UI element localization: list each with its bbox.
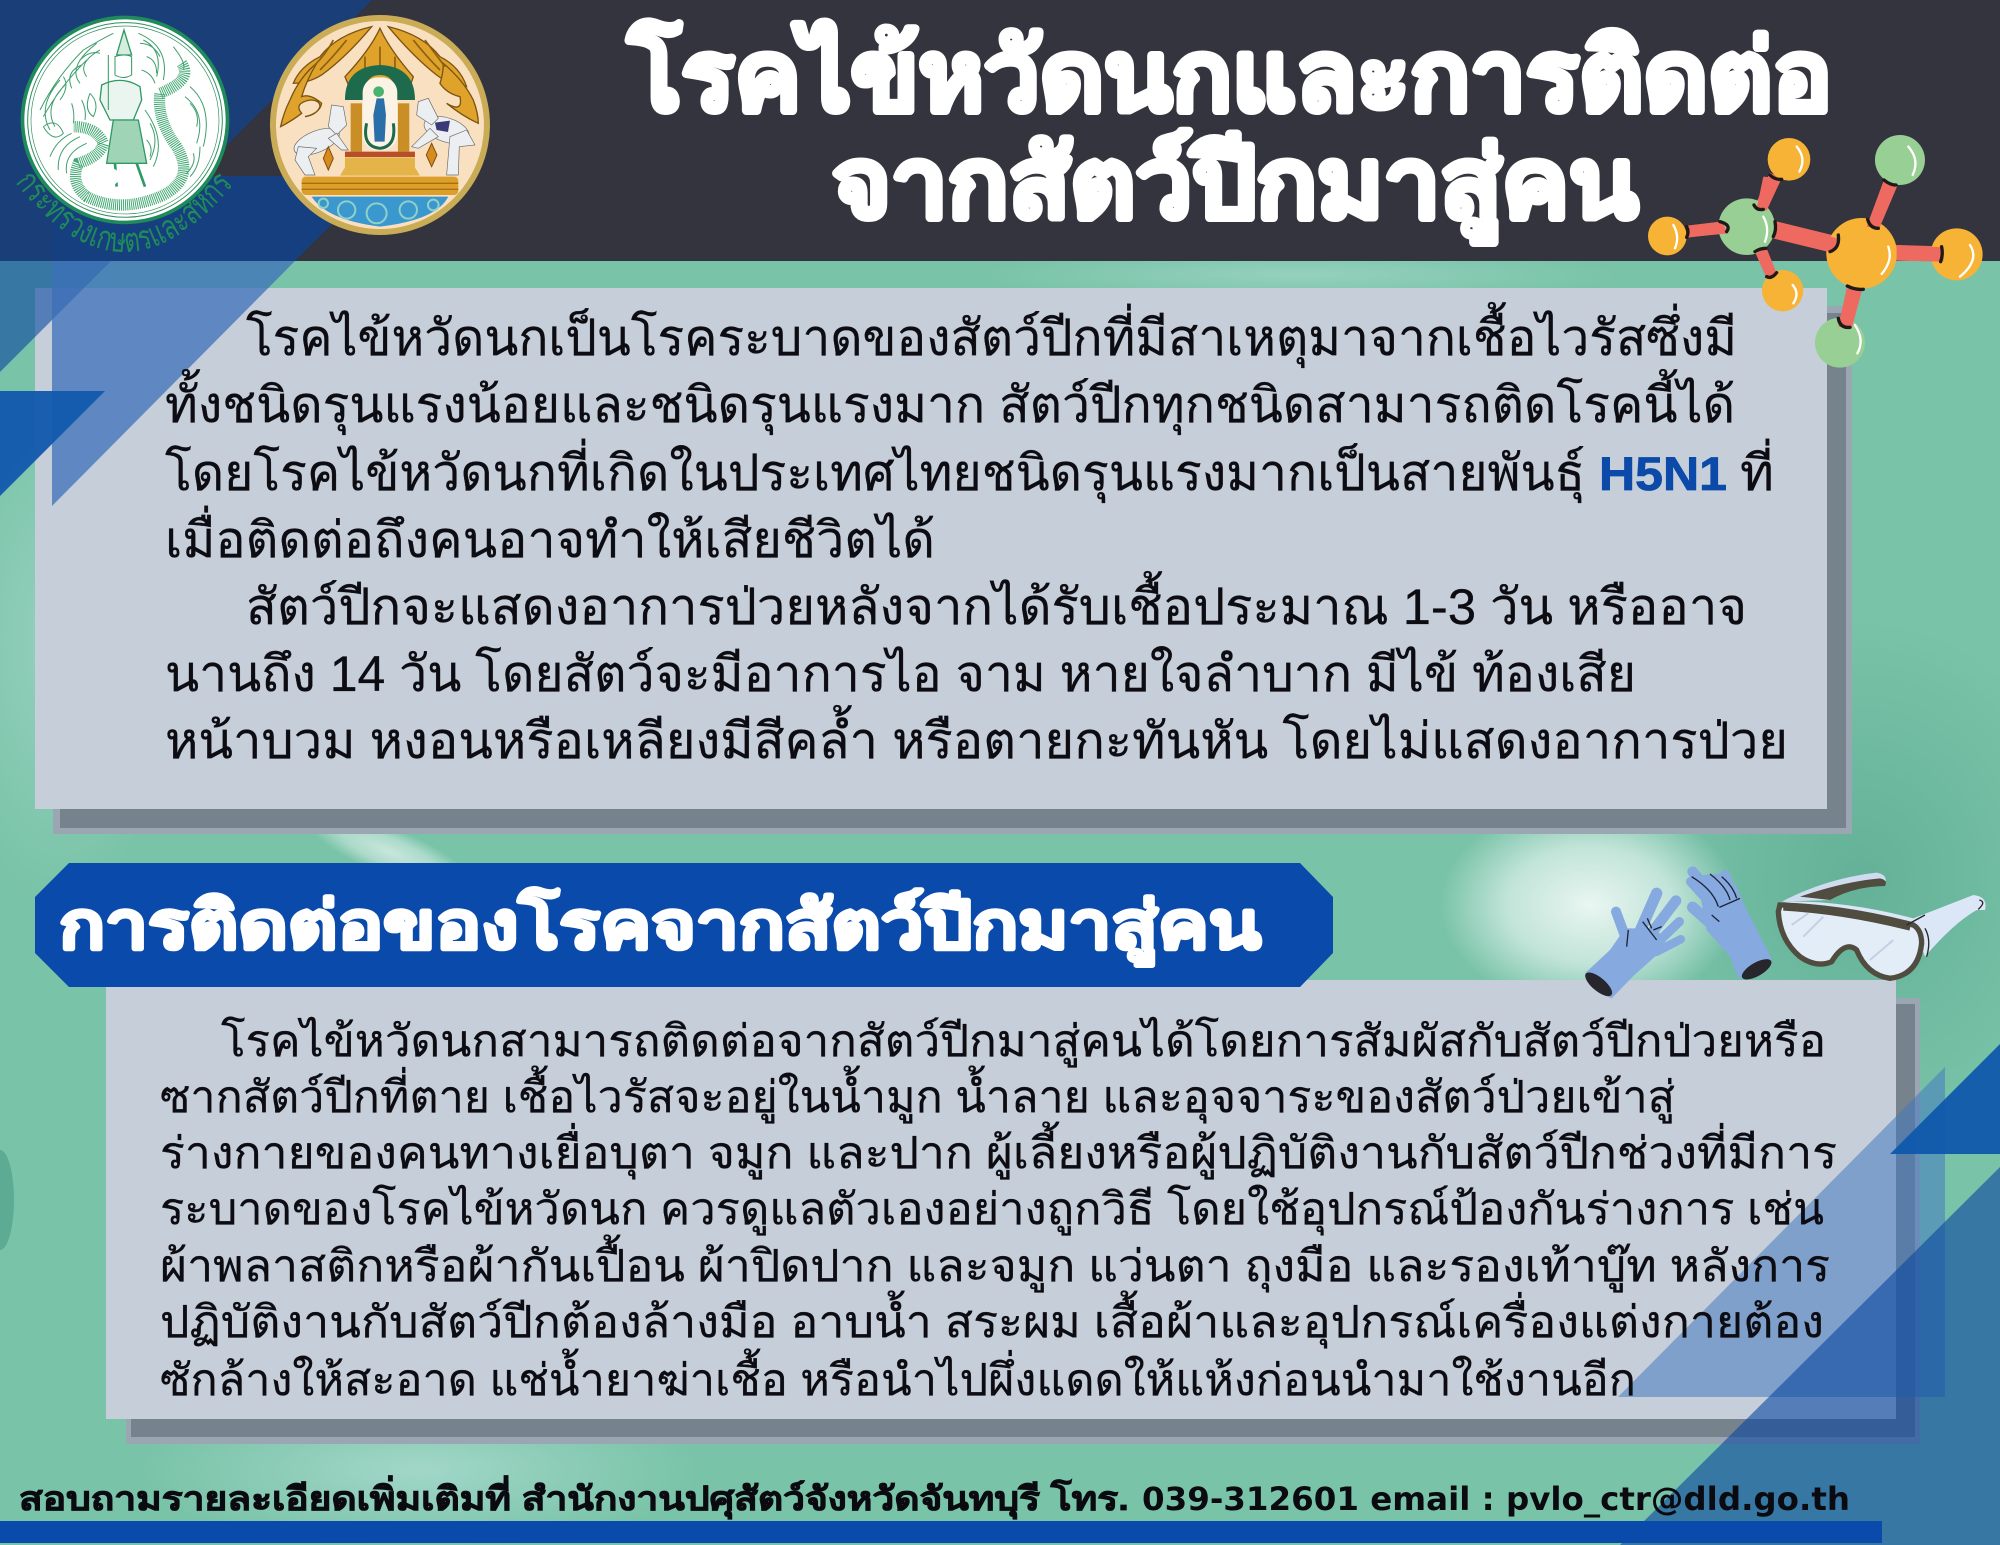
text block: transmission: โรคไข้หวัดนกสามารถติดต่อจากสัตว์ปีกมาสู่คนได้โดยการสัมผัสกับสัตว์ปีกป่วยหรือ bbox=[221, 1016, 1826, 1068]
icon: molecule bbox=[1648, 135, 1983, 368]
panel: transmission shadow bbox=[126, 998, 1920, 1444]
footer contact text: สอบถามรายละเอียดเพิ่มเติมที่ สำนักงานปศุสัตว์จังหวัดจันทบุรี โทร. bbox=[19, 1475, 1129, 1520]
text block: transmission: ปฏิบัติงานกับสัตว์ปีกต้องล้างมือ อาบน้ำ สระผม เสื้อผ้าและอุปกรณ์เครื่องแต่งกายต้อง bbox=[160, 1290, 1824, 1349]
footer contact text bbox=[19, 1475, 1850, 1520]
text block: disease description: โรคไข้หวัดนกเป็นโรคระบาดของสัตว์ปีกที่มีสาเหตุมาจากเชื้อไวรัสซึ่งมี bbox=[246, 302, 1737, 368]
text block: transmission bbox=[160, 1016, 1837, 1405]
text block: transmission: ร่างกายของคนทางเยื่อบุตา จมูก และปาก ผู้เลี้ยงหรือผู้ปฏิบัติงานกับสัตว์ปีกช่วงที่มีการ bbox=[160, 1121, 1837, 1180]
panel: disease description shadow bbox=[53, 306, 1852, 834]
text block: disease description: ทั้งชนิดรุนแรงน้อยและชนิดรุนแรงมาก สัตว์ปีกทุกชนิดสามารถติดโรคนี้ได้ bbox=[165, 369, 1735, 435]
text block: disease description: เมื่อติดต่อถึงคนอาจทำให้เสียชีวิตได้ bbox=[165, 506, 935, 568]
icon: rubber gloves bbox=[1582, 872, 1774, 1000]
text block: transmission: ซากสัตว์ปีกที่ตาย เชื้อไวรัสจะอยู่ในน้ำมูก น้ำลาย และอุจจาระของสัตว์ป่วยเข้าสู่ bbox=[160, 1065, 1675, 1124]
decorative blue triangles top left bbox=[0, 0, 380, 506]
text block: disease description: หน้าบวม หงอนหรือเหลียงมีสีคล้ำ หรือตายกะทันหัน โดยไม่แสดงอาการป่วย bbox=[165, 705, 1788, 769]
decorative blue triangles bottom right bbox=[1618, 1044, 2000, 1545]
text block: disease description: ที่ bbox=[1740, 439, 1774, 501]
panel: transmission bbox=[106, 980, 1896, 1419]
text block: transmission: ซักล้างให้สะอาด แช่น้ำยาฆ่าเชื้อ หรือนำไปผึ่งแดดให้แห้งก่อนนำมาใช้งานอีก bbox=[160, 1348, 1636, 1405]
header band bbox=[0, 0, 2000, 261]
footer contact text: 039-312601 email : pvlo_ctr@dld.go.th bbox=[1142, 1480, 1850, 1518]
ministry name curved text bbox=[16, 173, 231, 252]
title: โรคไข้หวัดนกและการติดต่อ bbox=[627, 20, 1832, 131]
title bbox=[627, 20, 1832, 245]
section heading text: การติดต่อของโรคจากสัตว์ปีกมาสู่คน bbox=[59, 886, 1261, 967]
title: จากสัตว์ปีกมาสู่คน bbox=[832, 128, 1638, 245]
text block: disease description: โดยโรคไข้หวัดนกที่เกิดในประเทศไทยชนิดรุนแรงมากเป็นสายพันธุ์ bbox=[165, 439, 1585, 503]
icon: agriculture ministry seal bbox=[21, 16, 229, 224]
icon: safety goggles bbox=[1778, 873, 1986, 978]
icon: livestock department seal bbox=[270, 15, 490, 235]
text block: disease description: นานถึง 14 วัน โดยสัตว์จะมีอาการไอ จาม หายใจลำบาก มีไข้ ท้องเสีย bbox=[165, 646, 1636, 702]
text block: transmission: ระบาดของโรคไข้หวัดนก ควรดูแลตัวเองอย่างถูกวิธี โดยใช้อุปกรณ์ป้องกันร่างการ เช่น bbox=[160, 1184, 1824, 1236]
highlighted strain name: H5N1 bbox=[1599, 447, 1727, 500]
text block: disease description: สัตว์ปีกจะแสดงอาการป่วยหลังจากได้รับเชื้อประมาณ 1-3 วัน หรืออาจ bbox=[246, 571, 1747, 635]
text block: disease description bbox=[165, 302, 1788, 769]
text block: transmission: ผ้าพลาสติกหรือผ้ากันเปื้อน ผ้าปิดปาก และจมูก แว่นตา ถุงมือ และรองเท้าบู๊ท หลังการ bbox=[160, 1234, 1830, 1293]
footer bar bbox=[0, 1521, 1882, 1543]
section heading banner bbox=[35, 863, 1333, 987]
panel: disease description bbox=[35, 288, 1827, 809]
